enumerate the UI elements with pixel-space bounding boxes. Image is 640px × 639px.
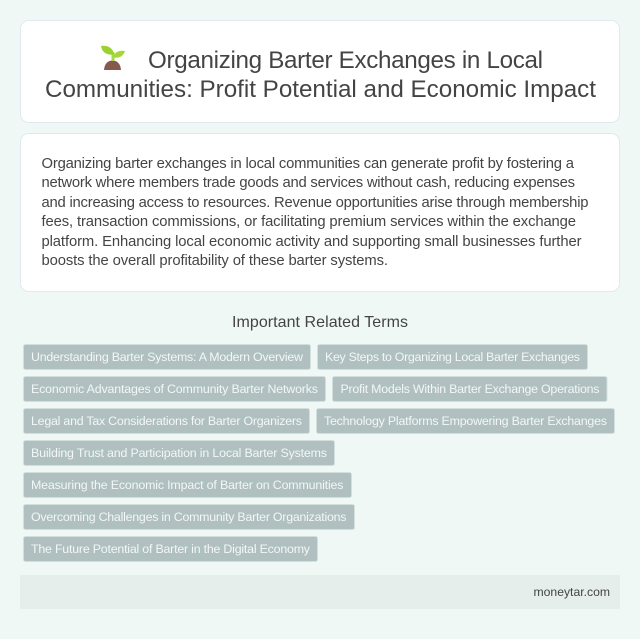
tag: The Future Potential of Barter in the Digital Economy xyxy=(31,542,311,556)
heading: important related terms: Important Related Terms xyxy=(232,314,408,331)
tag xyxy=(316,408,614,434)
summary paragraph: Organizing barter exchanges in local communities can generate profit by fostering a xyxy=(42,156,575,172)
tag xyxy=(24,504,354,530)
summary paragraph: boosts the overall profitability of these barter systems. xyxy=(42,253,388,269)
tag xyxy=(24,344,310,370)
footer xyxy=(20,575,620,609)
tag: Economic Advantages of Community Barter Networks xyxy=(31,382,318,396)
title xyxy=(45,47,596,103)
summary paragraph: platform. Enhancing local economic activity and supporting small businesses further xyxy=(42,234,582,250)
tag: Key Steps to Organizing Local Barter Exchanges xyxy=(325,350,580,364)
tag xyxy=(24,472,352,498)
title: Organizing Barter Exchanges in Local xyxy=(148,47,543,74)
panel: summary card xyxy=(20,134,620,292)
tag: Profit Models Within Barter Exchange Operations xyxy=(340,382,600,396)
tag xyxy=(24,376,326,402)
summary paragraph: and increasing access to resources. Revenue opportunities arise through membership xyxy=(42,195,588,211)
panel: title card xyxy=(20,20,620,122)
tag: Technology Platforms Empowering Barter Exchanges xyxy=(324,414,607,428)
tag: Building Trust and Participation in Local Barter Systems xyxy=(31,446,327,460)
tag xyxy=(332,376,607,402)
title: Communities: Profit Potential and Economic Impact xyxy=(45,76,596,103)
summary paragraph: network where members trade goods and services without cash, reducing expenses xyxy=(42,175,575,191)
icon: seedling xyxy=(101,46,125,70)
summary paragraph xyxy=(42,156,588,269)
tag: Understanding Barter Systems: A Modern Overview xyxy=(31,350,303,364)
tag xyxy=(24,536,318,562)
tag: Overcoming Challenges in Community Barter Organizations xyxy=(31,510,346,524)
tag xyxy=(24,440,334,466)
tag xyxy=(24,408,310,434)
panel: related term tags xyxy=(24,344,614,562)
tag: Measuring the Economic Impact of Barter on Communities xyxy=(31,478,344,492)
tag xyxy=(318,344,588,370)
footer source text: moneytar.com xyxy=(534,585,610,599)
tag: Legal and Tax Considerations for Barter Organizers xyxy=(31,414,302,428)
summary paragraph: fees, transaction commissions, or facilitating premium services within the exchange xyxy=(42,214,576,230)
